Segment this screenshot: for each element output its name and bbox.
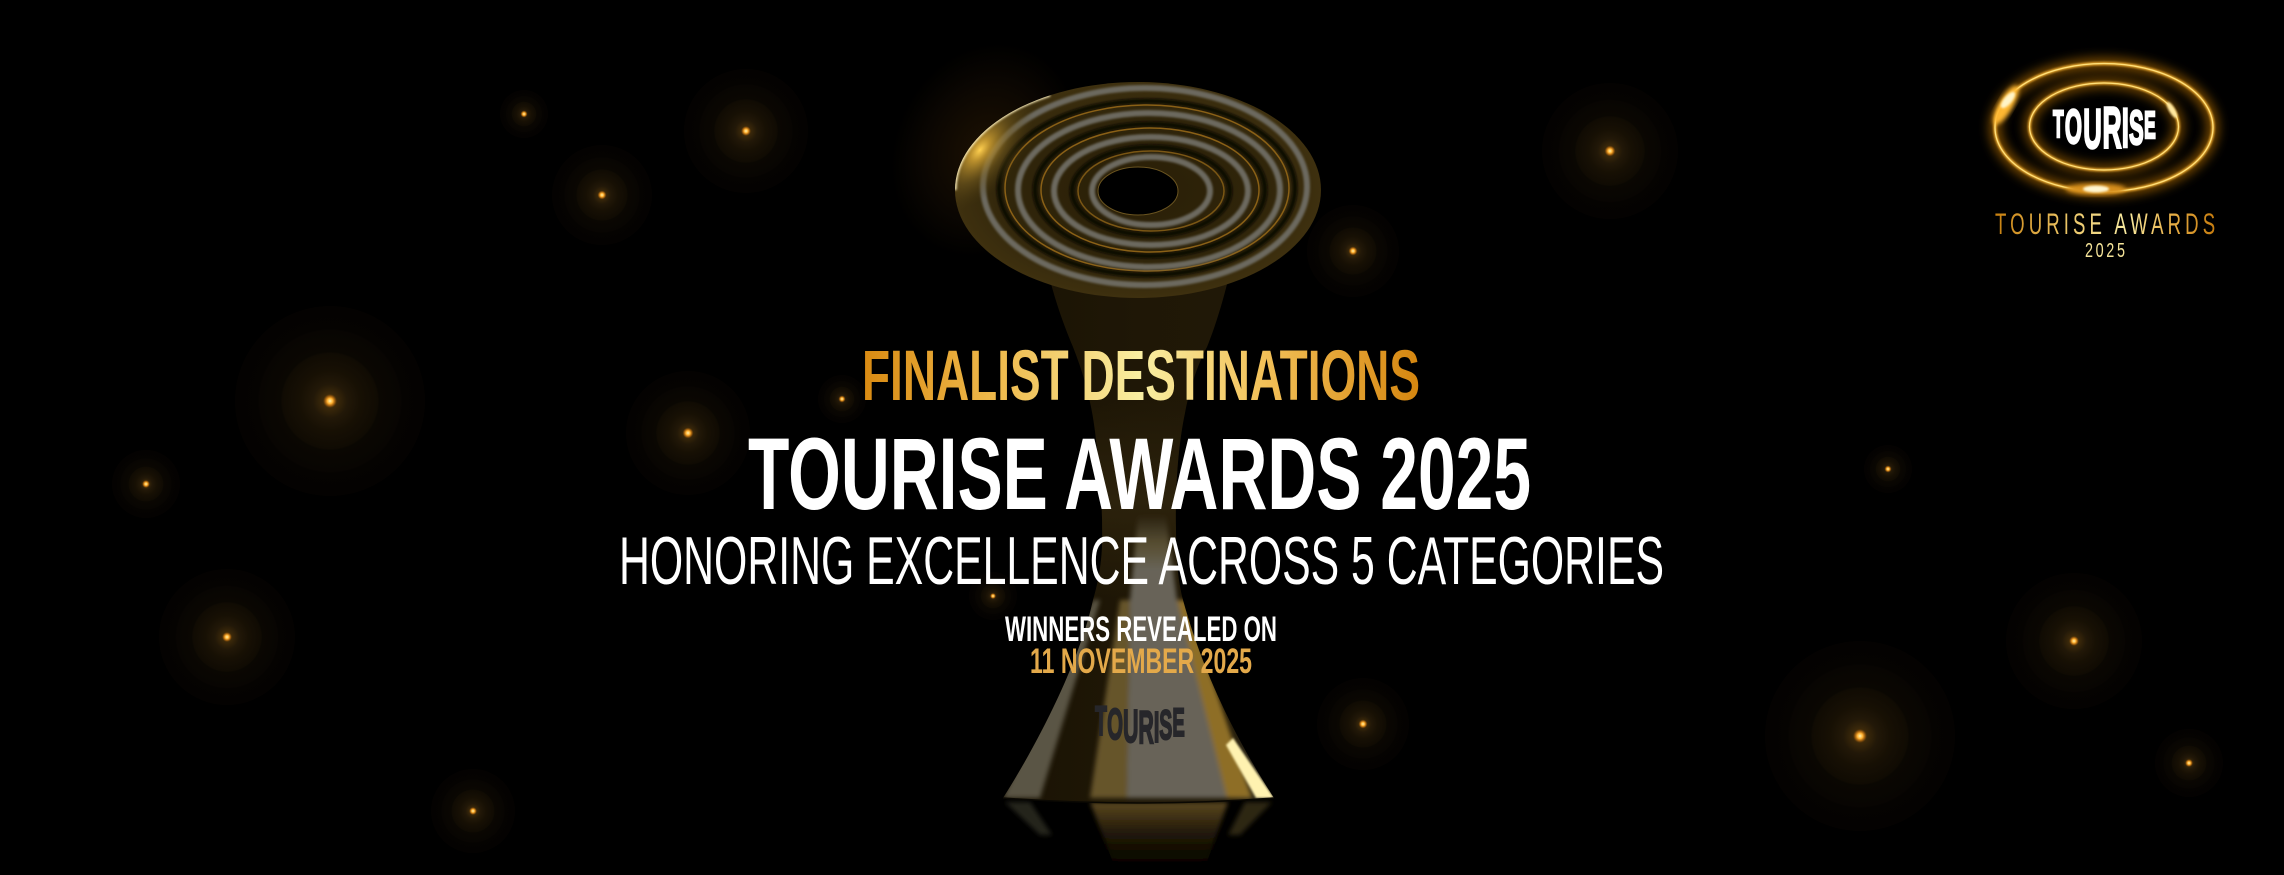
logo glowing rings xyxy=(1995,64,2213,192)
logo wordmark: U xyxy=(2083,99,2102,161)
title: TOURISE AWARDS 2025 xyxy=(748,417,1531,531)
logo flares xyxy=(1989,82,2179,195)
trophy disc xyxy=(955,82,1321,298)
trophy engraved logo: T xyxy=(1095,697,1107,744)
tagline: HONORING EXCELLENCE ACROSS 5 CATEGORIES xyxy=(619,523,1664,599)
reveal date: 11 NOVEMBER 2025 xyxy=(1030,642,1252,681)
trophy engraved logo: O xyxy=(1107,701,1123,749)
logo caption: TOURISE AWARDS xyxy=(1995,208,2215,241)
trophy engraved logo: U xyxy=(1123,701,1138,752)
trophy base line xyxy=(1003,798,1274,803)
logo wordmark: I xyxy=(2122,98,2129,160)
disc centre hole xyxy=(1098,167,1178,215)
trophy engraved logo: R xyxy=(1138,702,1154,753)
trophy engraved logo: S xyxy=(1159,701,1172,748)
trophy engraved logo: E xyxy=(1172,700,1185,745)
logo wordmark: O xyxy=(2065,99,2082,153)
logo wordmark: R xyxy=(2102,95,2122,161)
trophy glow xyxy=(857,12,1113,288)
disc gold highlight xyxy=(955,110,1028,198)
trophy xyxy=(916,72,1321,862)
trophy reflection xyxy=(1005,802,1272,868)
logo: tourise awards 2025 xyxy=(1989,64,2215,262)
logo year: 2025 xyxy=(2085,239,2125,262)
trophy stem xyxy=(1000,280,1280,810)
logo wordmark: T xyxy=(2053,104,2064,146)
logo wordmark: S xyxy=(2129,100,2144,154)
winners revealed label: WINNERS REVEALED ON xyxy=(1005,610,1277,649)
logo wordmark: E xyxy=(2144,105,2156,147)
trophy engraved logo: I xyxy=(1154,704,1159,752)
sub-heading: finalist destinations: FINALIST DESTINATIONS xyxy=(862,337,1420,416)
